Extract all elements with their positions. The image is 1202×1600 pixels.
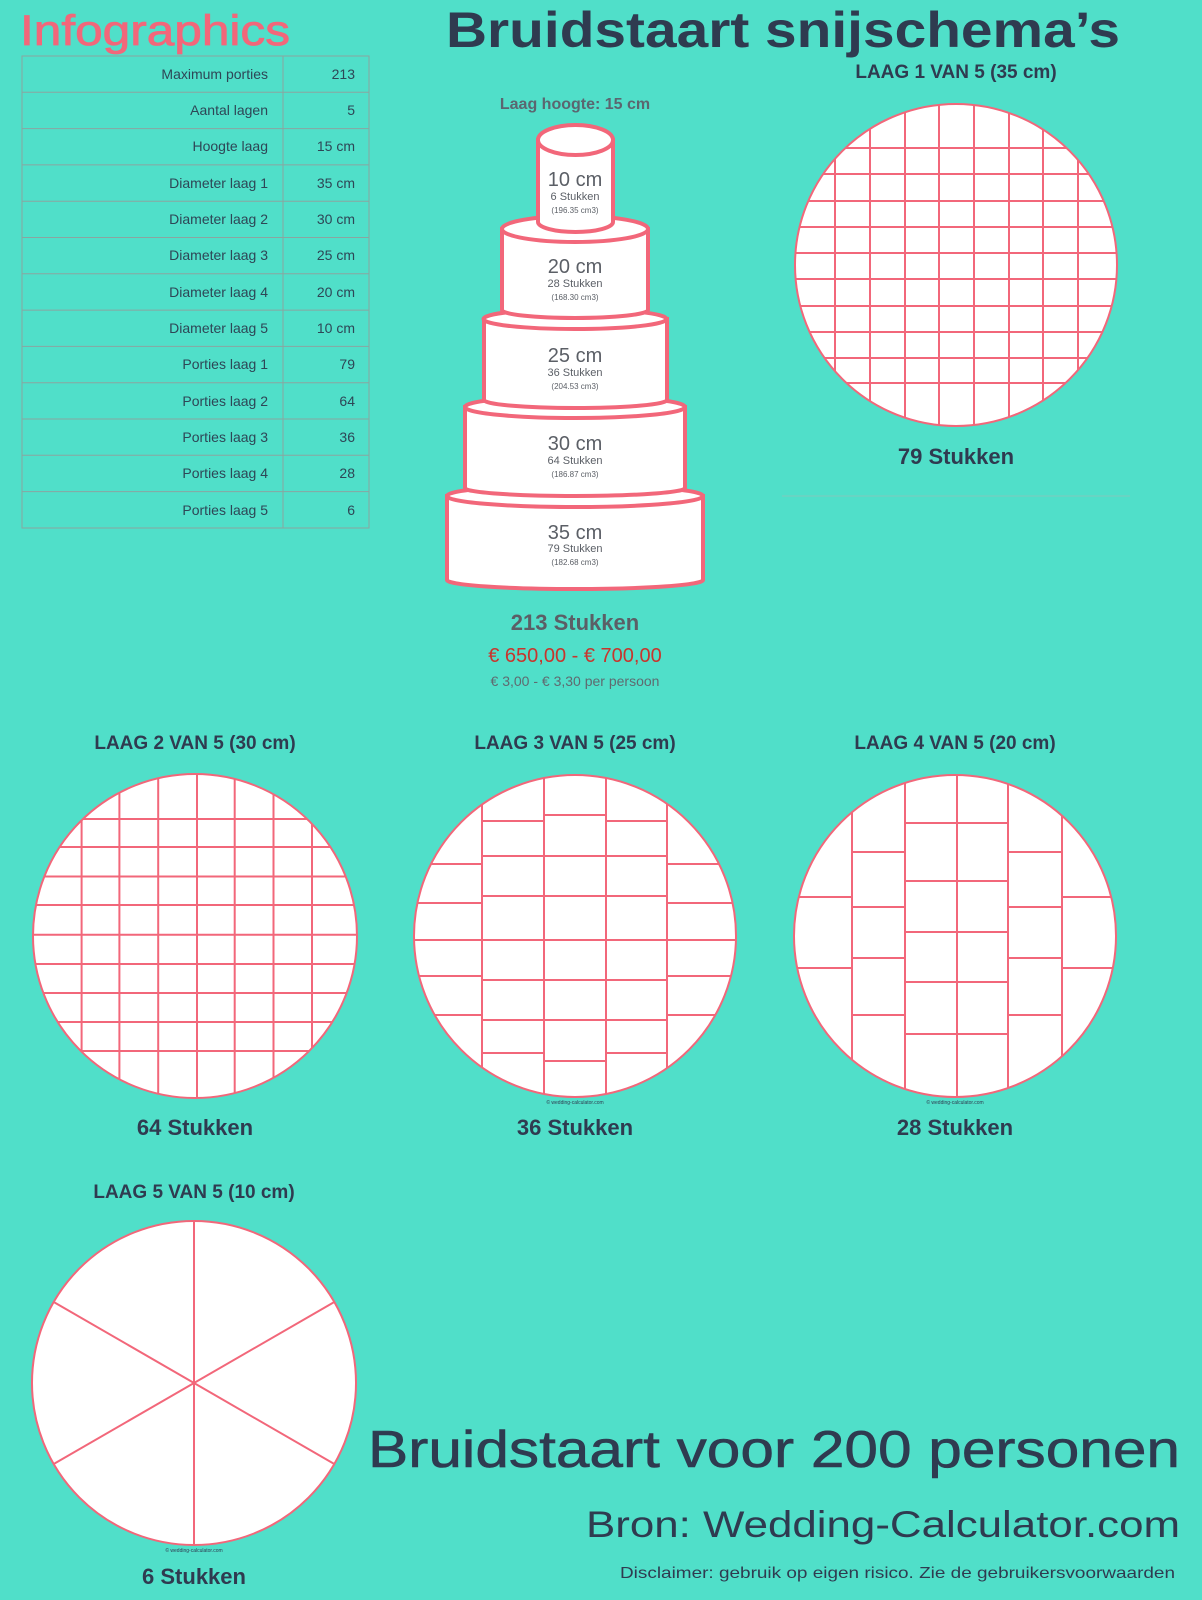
cake illustration: Laag hoogte: 15 cm: [500, 96, 650, 113]
table: specifications: 64: [339, 393, 355, 409]
cake illustration: 25 cm: [548, 345, 602, 367]
table: specifications: 30 cm: [317, 211, 355, 227]
table: specifications: Diameter laag 1: [169, 175, 268, 191]
cake illustration: (186.87 cm3): [551, 470, 599, 479]
cake illustration: (182.68 cm3): [551, 558, 599, 567]
table: specifications: Aantal lagen: [190, 102, 268, 118]
table: specifications: Diameter laag 5: [169, 320, 268, 336]
panel: layer 5: 6 Stukken: [142, 1564, 246, 1589]
cake illustration: 10 cm: [548, 169, 602, 191]
table: specifications: Diameter laag 3: [169, 247, 268, 263]
cake illustration: 36 Stukken: [547, 367, 603, 379]
panel: layer 1: LAAG 1 VAN 5 (35 cm): [855, 62, 1057, 83]
table: specifications: 10 cm: [317, 320, 355, 336]
cake illustration: (204.53 cm3): [551, 382, 599, 391]
cake illustration: (168.30 cm3): [551, 293, 599, 302]
cake illustration: 30 cm: [548, 433, 602, 455]
panel: layer 4: [790, 733, 1120, 1140]
cake illustration: 6 Stukken: [551, 191, 599, 203]
table: specifications: 36: [339, 429, 355, 445]
panel: layer 5: © wedding-calculator.com: [165, 1547, 223, 1554]
cake illustration: 79 Stukken: [547, 543, 603, 555]
table: specifications: 28: [339, 465, 355, 481]
panel: layer 4: © wedding-calculator.com: [926, 1099, 984, 1106]
cake totals: € 650,00 - € 700,00: [488, 645, 662, 667]
panel: layer 4: 28 Stukken: [897, 1115, 1013, 1140]
panel: layer 5: LAAG 5 VAN 5 (10 cm): [93, 1182, 295, 1203]
panel: layer 3: 36 Stukken: [517, 1115, 633, 1140]
source: Bron: Wedding-Calculator.com: [586, 1504, 1180, 1545]
table: specifications: 35 cm: [317, 175, 355, 191]
cake totals: € 3,00 - € 3,30 per persoon: [491, 673, 659, 689]
panel: layer 5: [32, 1182, 356, 1589]
main title: Bruidstaart snijschema’s: [446, 2, 1120, 58]
cake illustration: (196.35 cm3): [551, 206, 599, 215]
panel: layer 4: LAAG 4 VAN 5 (20 cm): [854, 733, 1056, 754]
cake illustration: 64 Stukken: [547, 455, 603, 467]
table: specifications: 79: [339, 356, 355, 372]
panel: layer 2: [30, 733, 360, 1140]
disclaimer: Disclaimer: gebruik op eigen risico. Zie de gebruikersvoorwaarden: [620, 1565, 1175, 1582]
table: specifications: Porties laag 1: [182, 356, 268, 372]
table: specifications: 15 cm: [317, 138, 355, 154]
panel: layer 1: 79 Stukken: [898, 444, 1014, 469]
table: specifications: Hoogte laag: [192, 138, 268, 154]
table: specifications: Porties laag 2: [182, 393, 268, 409]
table: specifications: 213: [332, 66, 355, 82]
panel: layer 3: [410, 733, 740, 1140]
panel: layer 2: LAAG 2 VAN 5 (30 cm): [94, 733, 296, 754]
table: specifications: 6: [347, 502, 355, 518]
panel: layer 1: [782, 62, 1130, 496]
panel: layer 3: © wedding-calculator.com: [546, 1099, 604, 1106]
brand: Infographics: Infographics: [20, 7, 290, 55]
footer title: Bruidstaart voor 200 personen: [368, 1421, 1180, 1479]
table: specifications: 20 cm: [317, 284, 355, 300]
table: specifications: Porties laag 3: [182, 429, 268, 445]
panel: layer 2: 64 Stukken: [137, 1115, 253, 1140]
cake totals: 213 Stukken: [511, 610, 639, 635]
table: specifications: 5: [347, 102, 355, 118]
panel: layer 3: LAAG 3 VAN 5 (25 cm): [474, 733, 676, 754]
table: specifications: Maximum porties: [161, 66, 268, 82]
cake illustration: 20 cm: [548, 256, 602, 278]
cake illustration: [447, 96, 703, 589]
cake illustration: 35 cm: [548, 522, 602, 544]
table: specifications: 25 cm: [317, 247, 355, 263]
table: specifications: Porties laag 4: [182, 465, 268, 481]
table: specifications: Diameter laag 4: [169, 284, 268, 300]
table: specifications: Porties laag 5: [182, 502, 268, 518]
table: specifications: Diameter laag 2: [169, 211, 268, 227]
table: specifications: [22, 56, 369, 528]
cake totals: [488, 610, 662, 689]
cake illustration: 28 Stukken: [547, 278, 603, 290]
